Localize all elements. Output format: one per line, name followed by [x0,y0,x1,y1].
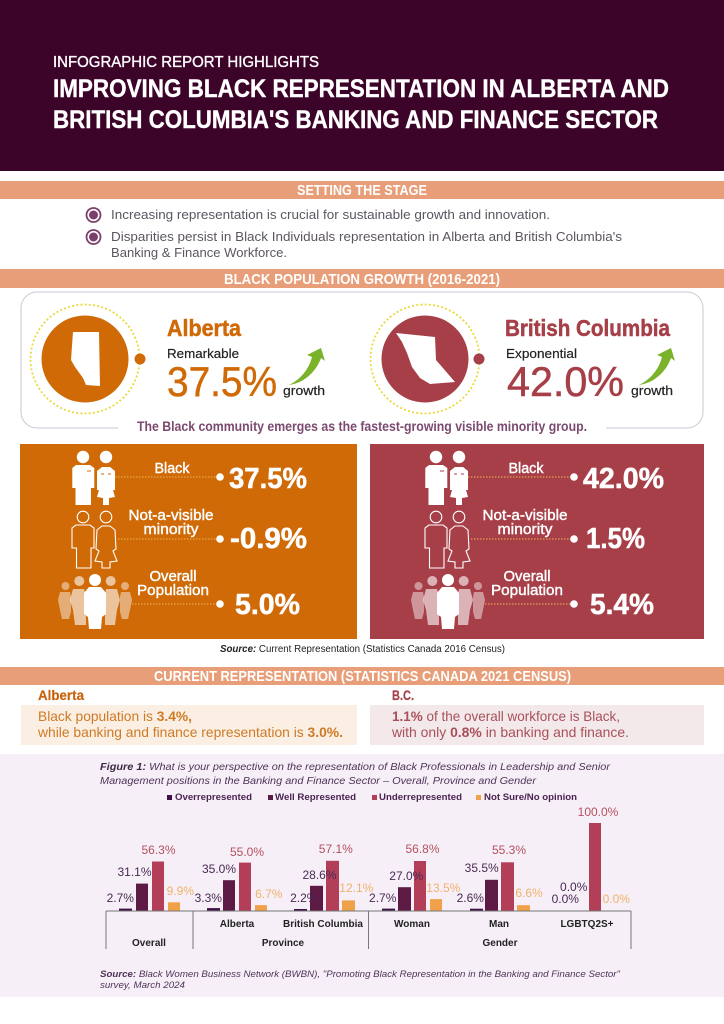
label: Overall Population: Overall [150,569,196,585]
icon: overall population group [58,574,132,629]
panel: B.C. representation [370,687,704,745]
stat: British Columbia growth [505,315,675,405]
bars: underrepresented [152,823,601,911]
value labels: 9.9% [167,884,194,898]
icon: Black man and woman [72,451,115,505]
bullet text 2: Banking & Finance Workforce. [111,245,287,260]
section heading: black population growth: BLACK POPULATION GROWTH (2016-2021) [224,271,500,288]
panel: British Columbia comparison [370,444,704,639]
value labels: 28.6% [302,868,337,882]
label: Overall Population: Population [491,583,563,599]
source note: BWBN survey [100,969,621,991]
stat: Alberta growth: growth [283,383,325,398]
figure caption: Management positions in the Banking and Finance Sector – Overall, Province and Gender [100,775,537,787]
label: Overall Population [137,569,209,599]
panel: B.C. representation: 1.1% of the overall workforce is Black, [392,708,620,724]
figure caption: Figure 1: What is your perspective on the representation of Black Professionals in Leadership and Senior [100,761,611,773]
stat: Alberta growth: Remarkable [167,346,239,361]
icon: growth arrow [289,348,325,385]
axis labels: LGBTQ2S+ [560,919,614,930]
axis labels: Man [489,919,509,930]
section heading: current representation: CURRENT REPRESENTATION (STATISTICS CANADA 2021 CENSUS) [154,668,571,685]
icon: not-a-visible-minority man and woman [72,511,117,568]
stat: Alberta growth: Alberta [167,315,241,341]
source note: census 2016: Source: Current Representation (Statistics Canada 2016 Census) [220,644,505,655]
panel: Alberta representation: Alberta [38,687,84,703]
value labels: 55.0% [230,845,264,859]
stat: British Columbia growth: 42.0% [507,358,624,405]
value labels: 56.8% [405,842,440,856]
panel: Alberta representation: while banking and finance representation is 3.0%. [37,724,343,740]
label: Overall Population: Population [137,583,209,599]
label: Black: Black [154,461,190,477]
bars: well represented [136,880,498,911]
icon: British Columbia map [370,304,484,414]
axis labels: Woman [394,919,430,930]
label: Not-a-visible minority: minority [498,522,553,538]
value labels: 0.0% [560,880,588,894]
value labels: 35.0% [202,862,236,876]
bar chart [106,805,631,949]
icon: overall population group [411,574,485,629]
bullet text 2: Disparities persist in Black Individuals representation in Alberta and British Columbia's [111,229,623,244]
icon: Black man and woman [425,451,468,505]
value: not-a-visible minority: -0.9% [230,523,307,555]
section heading: setting the stage [0,181,724,199]
value labels: 27.0% [389,869,424,883]
value labels: 12.1% [339,881,374,895]
value labels: 2.2% [290,891,318,905]
value: not-a-visible minority: 1.5% [586,523,645,555]
value labels: 2.7% [107,891,134,905]
label: Not-a-visible minority: minority [144,522,199,538]
panel: population growth by province [21,292,703,434]
bars: overrepresented [119,908,483,911]
value labels: 2.6% [457,891,484,905]
axis labels: Overall [132,938,166,949]
stat: British Columbia growth: Exponential [506,346,577,361]
value: overall population: 5.0% [235,589,300,621]
source note: BWBN survey: survey, March 2024 [100,980,185,991]
value: overall population: 5.4% [590,589,654,621]
value labels: 6.6% [515,886,543,900]
axis [106,911,631,949]
figure caption [100,761,611,787]
label: Not-a-visible minority [482,508,568,538]
panel: figure 1 survey chart [0,754,724,997]
value labels [107,805,630,906]
label: Black: Black [508,461,544,477]
chart legend [167,792,577,803]
value labels: 56.3% [141,843,176,857]
header banner [0,0,724,171]
value labels: 2.7% [369,891,397,905]
section heading: setting the stage: SETTING THE STAGE [297,182,427,199]
chart legend: Well Represented [275,792,356,803]
axis labels: Alberta [220,919,255,930]
bullet icon 2 [86,230,100,244]
panel: Alberta representation [21,687,357,745]
section heading: current representation [0,667,724,685]
label: Overall Population [491,569,563,599]
bars: not sure [168,899,530,911]
title: line 1: IMPROVING BLACK REPRESENTATION IN ALBERTA AND [53,75,669,103]
icon: not-a-visible-minority man and woman [425,511,470,568]
bullet text 2 [111,229,623,260]
title: line 2: BRITISH COLUMBIA'S BANKING AND FINANCE SECTOR [53,106,658,134]
panel: B.C. representation: B.C. [392,687,414,703]
callout: fastest-growing minority: The Black community emerges as the fastest-growing visible minority group. [137,418,587,434]
axis labels: Gender [482,938,518,949]
value labels: 57.1% [319,842,353,856]
value labels: 55.3% [492,843,526,857]
icon: growth arrow [639,348,675,385]
panel: Alberta representation: Black population is 3.4%, [38,708,192,724]
title: report label: INFOGRAPHIC REPORT HIGHLIGHTS [53,54,319,71]
label: Not-a-visible minority [128,508,214,538]
stat: British Columbia growth: growth [631,383,673,398]
label: Not-a-visible minority: Not-a-visible [128,508,214,524]
stat: Alberta growth: 37.5% [167,358,277,405]
section heading: black population growth [0,269,724,288]
axis labels: Province [262,938,305,949]
value labels: 100.0% [578,805,619,819]
bullet list: setting the stage [86,207,623,260]
label: Not-a-visible minority: Not-a-visible [482,508,568,524]
axis labels [132,919,614,949]
icon: Alberta map [30,304,146,414]
value labels: 6.7% [255,887,283,901]
value labels: 0.0% [603,892,630,906]
value labels: 31.1% [117,865,152,879]
chart legend: Overrepresented [175,792,252,803]
chart legend: Not Sure/No opinion [484,792,577,803]
value: Black: 37.5% [229,463,307,495]
value labels: 35.5% [465,861,499,875]
value labels: 13.5% [426,881,461,895]
panel: Alberta comparison [20,444,357,639]
stat: Alberta growth [167,315,325,405]
source note: BWBN survey: Source: Black Women Business Network (BWBN), "Promoting Black Representation in the Banking and Finance Sector" [100,969,621,980]
axis labels: British Columbia [283,919,363,930]
value: Black: 42.0% [583,463,664,495]
label: Overall Population: Overall [504,569,550,585]
chart legend: Underrepresented [379,792,462,803]
value labels: 3.3% [195,891,222,905]
panel: B.C. representation: with only 0.8% in banking and finance. [391,724,629,740]
bullet icon 1 [86,208,100,222]
bullet text 1: Increasing representation is crucial for sustainable growth and innovation. [111,207,550,222]
value labels: 0.0% [552,892,579,906]
stat: British Columbia growth: British Columbia [505,315,670,341]
